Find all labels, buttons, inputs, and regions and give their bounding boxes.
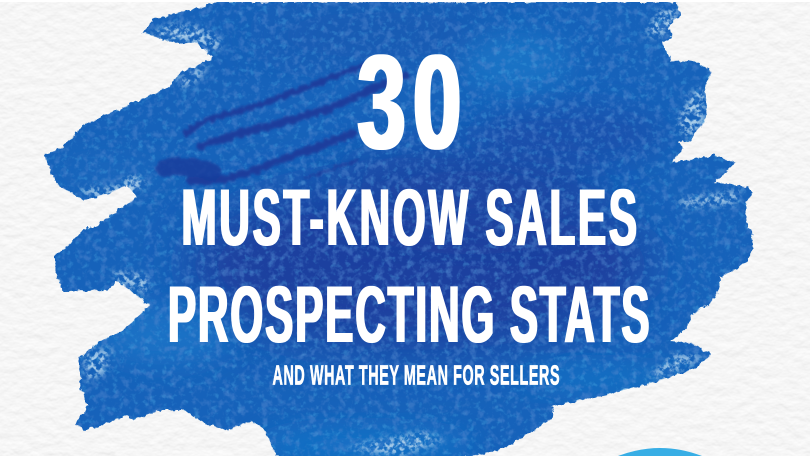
title (168, 27, 650, 391)
title number: 30: 30 (358, 27, 461, 178)
light blue paint blob at bottom (618, 448, 702, 456)
top white edge (0, 0, 810, 2)
bottom fill of brush stroke (285, 448, 465, 456)
title line: prospecting stats: PROSPECTING STATS (168, 269, 650, 360)
title line: must-know sales: MUST-KNOW SALES (182, 172, 637, 263)
subtitle: AND WHAT THEY MEAN FOR SELLERS (272, 359, 560, 391)
dark brush streaks (165, 64, 405, 181)
